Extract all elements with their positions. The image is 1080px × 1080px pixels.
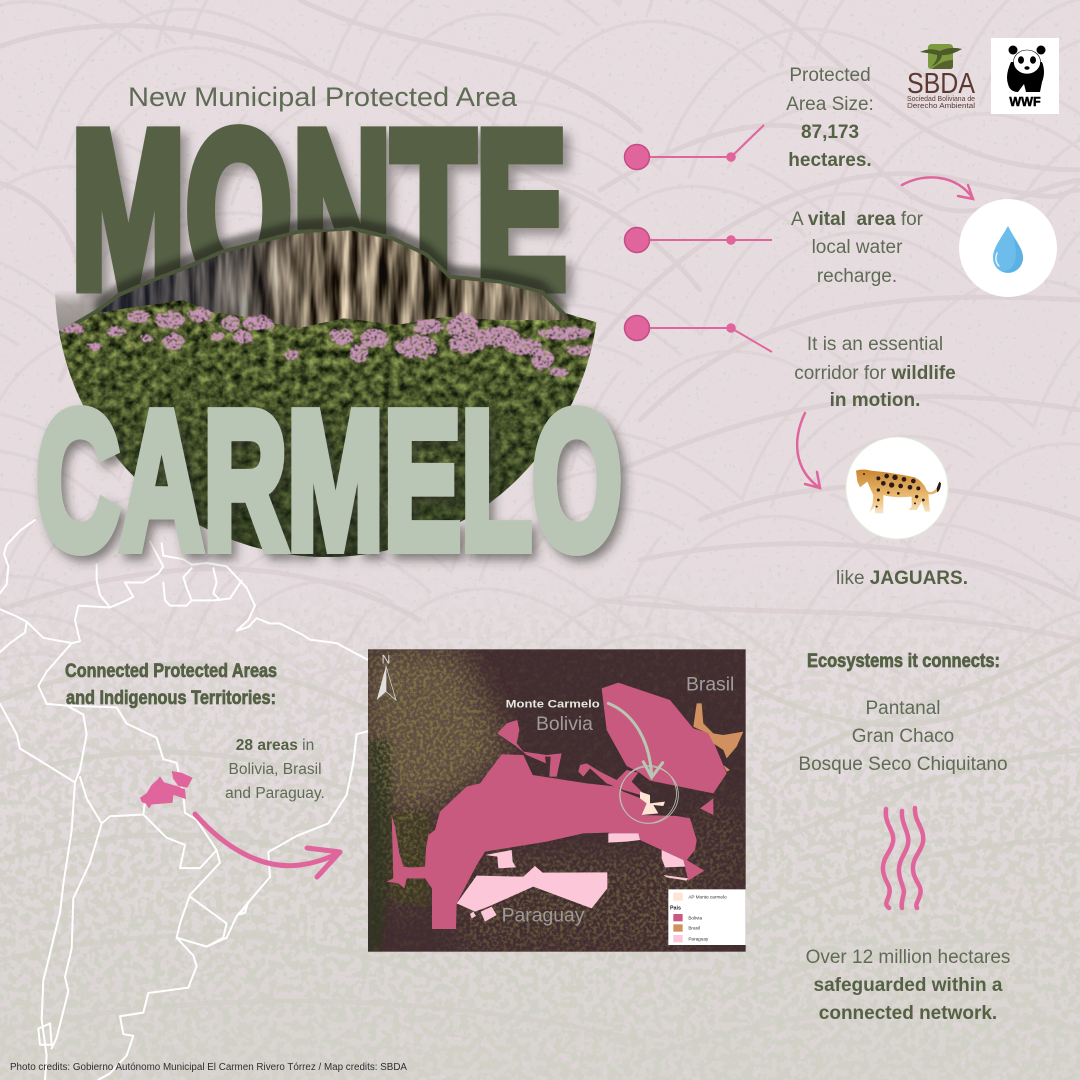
map: labels: Bolivia [536,714,593,735]
map: AP Monte Carmelo [640,792,665,815]
text: protected area size: hectares. [788,150,872,171]
photo: Monte Carmelo mountain [55,214,596,557]
heading: connected areas: and Indigenous Territories: [66,688,276,709]
map: Bolivia areas [387,683,727,929]
arrow to map [195,814,340,877]
logo: SBDA [907,44,976,110]
text: vital area: recharge. [817,266,897,287]
text: ecosystems list: Gran Chaco [852,726,954,747]
text: vital area: local water [812,237,903,258]
map: labels: Monte Carmelo [506,699,600,711]
arrow to jaguar icon [797,413,820,488]
text: wildlife corridor: corridor for wildlife [794,363,956,384]
subtitle: New Municipal Protected Area [128,82,518,112]
map: legend: Bolivia [688,915,702,920]
map: highlight circle [612,758,685,831]
South America outline map [0,520,370,1080]
map: legend: AP Monte carmelo [688,895,727,900]
map: protected areas network [368,649,746,952]
logo: WWF [991,38,1059,114]
map: legend [668,889,746,945]
map: legend: Brasil [688,926,700,931]
connector: wildlife corridor [624,316,772,352]
map: arrow to Monte Carmelo [608,703,663,777]
mini map: protected areas silhouette [140,771,193,808]
photo and map credits: Photo credits: Gobierno Autónomo Municipal El Carmen Rivero Tórrez / Map credits: SBDA [10,1062,407,1073]
map: legend: Paraguay [688,936,709,941]
text: ecosystems list: Bosque Seco Chiquitano [798,754,1008,775]
arrow to water icon [902,177,973,199]
text: 12 million hectares: Over 12 million hectares [806,947,1010,968]
map: north arrow [377,652,396,700]
text: wildlife corridor: It is an essential [807,334,943,355]
connector: area size [624,125,764,170]
logo: SBDA: Sociedad Boliviana de [907,96,975,103]
icon: water waves [883,808,923,908]
logo: WWF: WWF [1009,95,1041,109]
map: north arrow: N [382,652,390,666]
text: protected area size: Protected [789,65,871,86]
logo: SBDA: Derecho Ambiental [907,103,975,110]
title: CARMELO: CARMELO [36,371,622,590]
text: protected area size: Area Size: [786,94,874,115]
connector: water recharge [624,228,772,252]
text: vital area: A vital area for [791,209,923,230]
text: protected area size: 87,173 [801,122,859,143]
text: 12 million hectares: safeguarded within a [814,975,1003,996]
text: 28 areas: 28 areas in [236,737,314,754]
text: 28 areas: Bolivia, Brasil [228,761,322,778]
map: Brasil areas [693,703,743,772]
heading: ecosystems: Ecosystems it connects: [807,651,1000,672]
map: labels: Paraguay [502,906,585,927]
map: labels [502,675,734,927]
map: legend: Pais [670,905,681,911]
text: wildlife corridor: in motion. [830,390,920,411]
map: labels: Brasil [686,675,734,696]
logo: SBDA: SBDA [907,68,976,100]
title: MONTE: MONTE [71,85,567,335]
text: 28 areas: and Paraguay. [225,785,325,802]
text: 12 million hectares: connected network. [819,1003,997,1024]
icon: jaguar [846,437,948,539]
icon: water drop [959,199,1057,297]
text: ecosystems list: Pantanal [865,698,941,719]
text: like jaguars: like JAGUARS. [836,568,968,589]
heading: connected areas: Connected Protected Areas [65,661,277,682]
map: Paraguay areas [457,833,688,922]
